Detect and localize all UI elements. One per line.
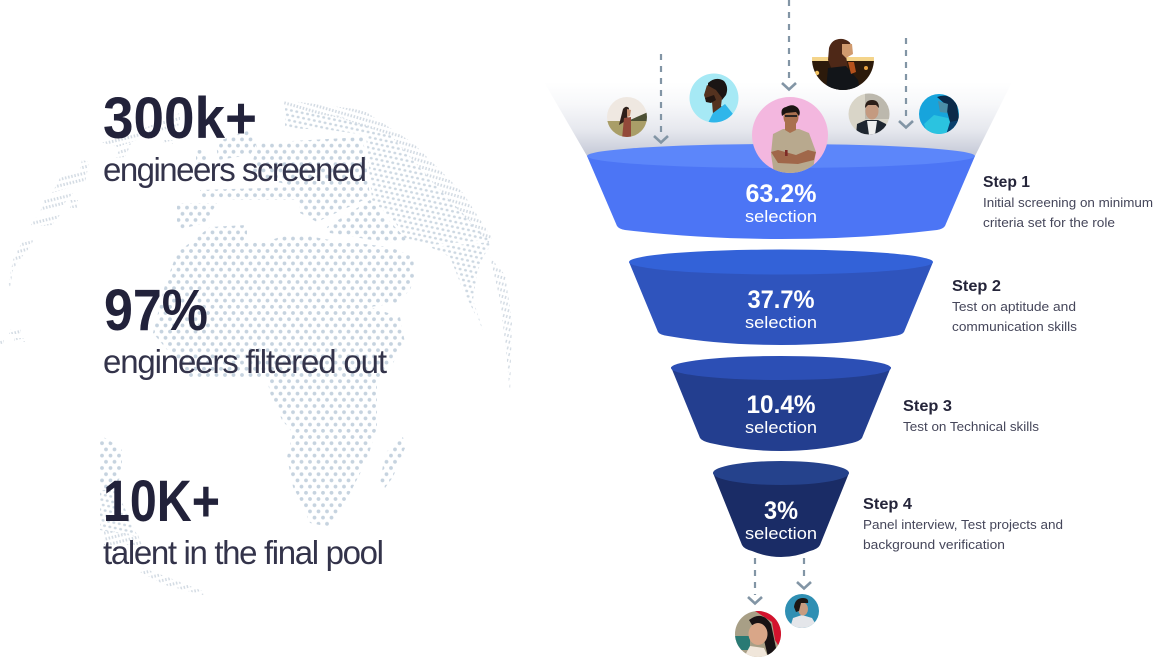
step 3 description — [903, 398, 1040, 434]
arrow: out of funnel left — [748, 558, 762, 604]
arrow: into funnel right — [899, 38, 913, 128]
stat: 97% engineers filtered out: engineers filtered out — [103, 343, 387, 380]
stat: 10K+ talent in the final pool: 10K+ — [103, 469, 220, 534]
step 2 description: Step 2 — [952, 278, 1001, 295]
step 4 description: Step 4 — [863, 496, 912, 513]
funnel step 4: selection — [745, 524, 817, 543]
stat: 97% engineers filtered out — [103, 278, 387, 380]
avatar: man in white hoodie on teal — [785, 594, 819, 628]
step 2 description: Test on aptitude and — [952, 299, 1076, 314]
funnel step 2: 37.7% — [748, 286, 814, 314]
stat: 97% engineers filtered out: 97% — [104, 278, 208, 343]
funnel step 1 labels: selection — [745, 207, 817, 226]
stat: 10K+ talent in the final pool — [103, 469, 384, 571]
avatar: woman in blue light — [918, 93, 960, 135]
step 4 description: background verification — [863, 537, 1005, 552]
funnel step 2 — [629, 250, 933, 345]
step 2 description: communication skills — [952, 319, 1078, 334]
stat: 300k+ engineers screened — [103, 86, 367, 188]
funnel step 4: 3% — [764, 497, 798, 525]
step 4 description: Panel interview, Test projects and — [863, 517, 1063, 532]
step 2 description — [952, 278, 1078, 334]
funnel step 3 — [671, 356, 891, 451]
avatar: woman in field — [607, 97, 647, 137]
step 4 description — [863, 496, 1063, 552]
stat: 300k+ engineers screened: engineers screened — [103, 151, 367, 188]
funnel step 3: 10.4% — [746, 391, 816, 419]
funnel step 1 labels: 63.2% — [746, 180, 816, 208]
step 1 description: Initial screening on minimum — [983, 195, 1153, 210]
arrow: out of funnel right — [797, 558, 811, 588]
funnel step 4 — [713, 461, 849, 557]
step 3 description: Test on Technical skills — [903, 419, 1040, 434]
funnel step 1 labels — [745, 180, 817, 226]
stat: 300k+ engineers screened: 300k+ — [103, 86, 257, 151]
step 1 description: Step 1 — [983, 174, 1030, 191]
funnel step 1 — [587, 144, 975, 239]
avatar: smiling man in jacket — [848, 93, 890, 135]
stat: 10K+ talent in the final pool: talent in the final pool — [103, 534, 384, 571]
avatar: woman at sunset — [812, 38, 874, 90]
step 3 description: Step 3 — [903, 398, 952, 415]
avatar: man in profile on cyan — [689, 73, 739, 123]
funnel mouth gradient — [544, 82, 1012, 156]
dotted globe map — [0, 100, 512, 595]
avatar: man with crossed arms on pink (featured) — [752, 97, 828, 174]
step 1 description: criteria set for the role — [983, 215, 1115, 230]
arrow: into funnel left — [654, 54, 668, 142]
avatar: smiling woman on red — [735, 611, 781, 657]
funnel step 2: selection — [745, 313, 817, 332]
funnel step 3: selection — [745, 418, 817, 437]
step 1 description — [983, 174, 1153, 230]
arrow: into funnel centre — [782, 0, 796, 90]
